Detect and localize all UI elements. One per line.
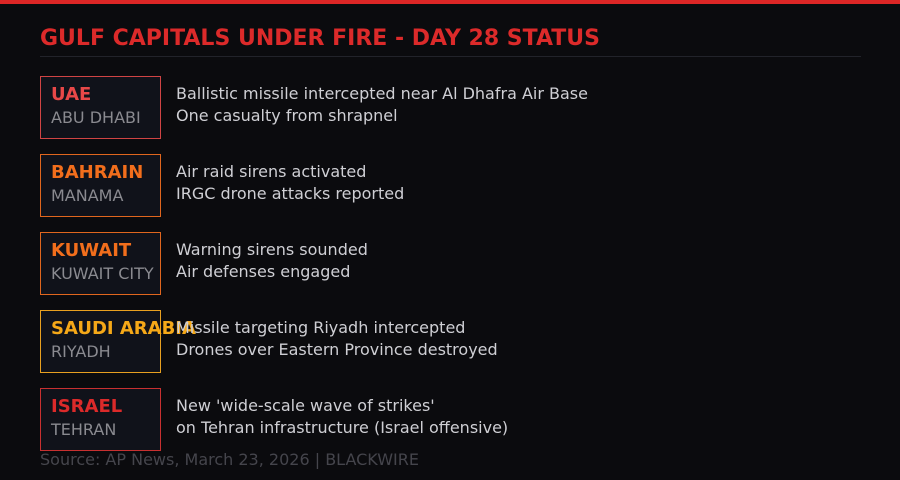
text: Israel: New 'wide-scale wave of strikes' <box>176 396 435 415</box>
label box: Saudi Arabia: RIYADH <box>51 342 111 361</box>
text: Kuwait <box>176 240 368 281</box>
text: Bahrain: Air raid sirens activated <box>176 162 366 181</box>
label box: Saudi Arabia: SAUDI ARABIA <box>51 318 196 339</box>
text: UAE: One casualty from shrapnel <box>176 106 398 125</box>
title: GULF CAPITALS UNDER FIRE - DAY 28 STATUS <box>40 26 600 51</box>
top bar <box>0 0 900 4</box>
label box: Kuwait <box>40 232 161 295</box>
label box: Saudi Arabia <box>40 310 161 373</box>
row: Israel <box>40 388 508 451</box>
label box: Israel: ISRAEL <box>51 396 122 417</box>
text: Israel: on Tehran infrastructure (Israel offensive) <box>176 418 508 437</box>
text: Israel <box>176 396 508 437</box>
text: Saudi Arabia: Missile targeting Riyadh intercepted <box>176 318 465 337</box>
label box: Kuwait: KUWAIT CITY <box>51 264 154 283</box>
row: Bahrain <box>40 154 404 217</box>
label box: Bahrain <box>40 154 161 217</box>
source footer: Source: AP News, March 23, 2026 | BLACKWIRE <box>40 450 419 469</box>
label box: UAE <box>40 76 161 139</box>
text: Saudi Arabia <box>176 318 498 359</box>
label box: UAE: UAE <box>51 84 91 105</box>
text: Bahrain: IRGC drone attacks reported <box>176 184 404 203</box>
text: Kuwait: Warning sirens sounded <box>176 240 368 259</box>
label box: Bahrain: BAHRAIN <box>51 162 143 183</box>
label box: Bahrain: MANAMA <box>51 186 123 205</box>
text: Bahrain <box>176 162 404 203</box>
row: Kuwait <box>40 232 368 295</box>
label box: Israel <box>40 388 161 451</box>
label box: UAE: ABU DHABI <box>51 108 141 127</box>
row: Saudi Arabia <box>40 310 498 373</box>
text: Kuwait: Air defenses engaged <box>176 262 350 281</box>
label box: Kuwait: KUWAIT <box>51 240 131 261</box>
label box: Israel: TEHRAN <box>51 420 116 439</box>
text: Saudi Arabia: Drones over Eastern Province destroyed <box>176 340 498 359</box>
text: UAE: Ballistic missile intercepted near Al Dhafra Air Base <box>176 84 588 103</box>
row: UAE <box>40 76 588 139</box>
text: UAE <box>176 84 588 125</box>
